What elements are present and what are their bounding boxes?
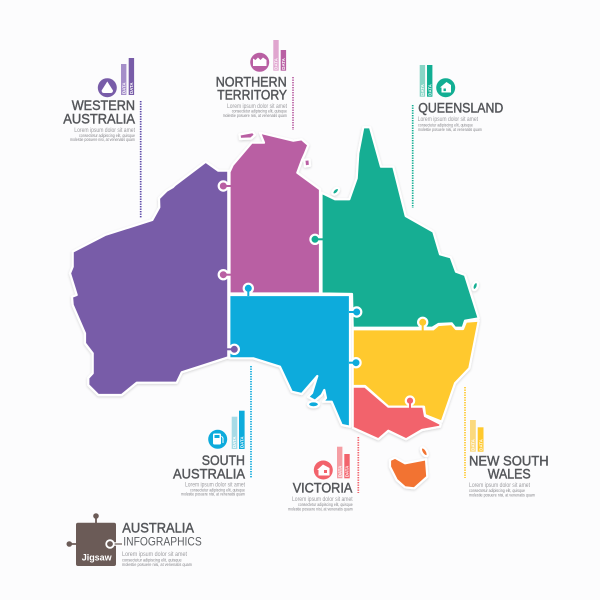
knob: New South Wales into Queensland bbox=[418, 318, 427, 331]
title: AUSTRALIA bbox=[122, 521, 194, 536]
bar chart: DATA bbox=[478, 438, 483, 451]
region: New South Wales bbox=[353, 321, 479, 422]
text block: molestie posuere nisi, at venenatis quam bbox=[181, 492, 245, 497]
panel: Victoria bbox=[288, 437, 358, 511]
bar chart: DATA bbox=[281, 57, 286, 70]
leader line bbox=[140, 101, 142, 218]
region: Northern Territory bbox=[230, 133, 320, 294]
heading: AUSTRALIA bbox=[173, 466, 245, 481]
icon: jigsaw piece: Jigsaw bbox=[82, 553, 112, 564]
region: Tasmania bbox=[390, 458, 427, 488]
leader line bbox=[464, 387, 466, 478]
text block bbox=[181, 481, 246, 497]
region: Queensland bbox=[322, 127, 479, 328]
knob: South Australia into Northern Territory bbox=[244, 284, 253, 296]
leader line bbox=[412, 105, 414, 208]
region: Victoria bbox=[353, 387, 441, 439]
heading bbox=[216, 75, 287, 102]
bar chart bbox=[273, 40, 286, 71]
bar chart: DATA bbox=[129, 82, 134, 94]
region: South Australia bbox=[229, 295, 350, 427]
bar chart: DATA bbox=[345, 465, 350, 477]
text block: consectetur adipiscing elit, quisque bbox=[79, 133, 136, 138]
panel: jigsaw logo and title bbox=[66, 513, 202, 567]
text block: consectetur adipiscing elit, quisque bbox=[122, 557, 182, 562]
text block: molestie posuere nisi, at venenatis quam bbox=[122, 562, 192, 567]
bar chart: DATA bbox=[420, 83, 425, 96]
text block: Lorem ipsum dolor sit amet bbox=[227, 103, 287, 110]
heading bbox=[469, 454, 549, 481]
icon: factory badge bbox=[250, 53, 269, 72]
knob: Victoria into New South Wales bbox=[406, 396, 414, 409]
heading: VICTORIA bbox=[293, 481, 352, 496]
heading: AUSTRALIA bbox=[63, 112, 135, 126]
island: Melville bbox=[240, 132, 255, 139]
text block: Lorem ipsum dolor sit amet bbox=[292, 496, 353, 503]
text block bbox=[122, 551, 192, 567]
icon: triangle badge bbox=[98, 78, 117, 97]
text block: consectetur adipiscing elit, quisque bbox=[190, 487, 246, 492]
knob: Northern Territory into Western Australia upper bbox=[219, 181, 231, 191]
title bbox=[122, 521, 202, 548]
text block: molestie posuere nisi, at venenatis quam bbox=[418, 127, 482, 132]
heading: NEW SOUTH bbox=[469, 454, 549, 469]
bar chart: DATA bbox=[274, 57, 279, 70]
text block: Lorem ipsum dolor sit amet bbox=[185, 481, 245, 488]
text block bbox=[418, 116, 482, 132]
text block: consectetur adipiscing elit, quisque bbox=[418, 123, 474, 128]
leader line bbox=[292, 77, 294, 130]
heading: QUEENSLAND bbox=[418, 101, 504, 116]
text block bbox=[223, 103, 288, 118]
bar chart bbox=[232, 411, 245, 449]
heading bbox=[63, 98, 135, 126]
text block: molestie posuere nisi, at venenatis quam bbox=[223, 113, 287, 118]
icon: house badge bbox=[436, 78, 455, 97]
knob: Queensland into Northern Territory bbox=[310, 235, 323, 244]
panel: Queensland bbox=[413, 65, 504, 208]
knob: South Australia into New South Wales bbox=[349, 358, 361, 367]
panel: Northern Territory bbox=[216, 40, 293, 130]
heading bbox=[173, 453, 245, 481]
text block: Lorem ipsum dolor sit amet bbox=[418, 116, 478, 123]
text block: consectetur adipiscing elit, quisque bbox=[232, 108, 288, 113]
leader line bbox=[250, 366, 252, 478]
knob: Western Australia into South Australia bbox=[227, 345, 239, 354]
heading: NORTHERN bbox=[216, 75, 287, 90]
heading: SOUTH bbox=[202, 453, 245, 468]
region: Western Australia bbox=[70, 162, 228, 395]
bar chart: DATA bbox=[427, 83, 432, 96]
island: Queensland east bbox=[472, 281, 479, 291]
island: Kangaroo bbox=[308, 401, 319, 407]
panel: Western Australia bbox=[63, 58, 141, 218]
text block: molestie posuere nisi, at venenatis quam bbox=[288, 506, 353, 511]
bar chart bbox=[121, 58, 134, 95]
map of Australia bbox=[70, 127, 479, 488]
text block: consectetur adipiscing elit, quisque bbox=[469, 488, 526, 493]
text block bbox=[288, 496, 353, 511]
leader line bbox=[357, 437, 359, 493]
text block: molestie posuere nisi, at venenatis quam bbox=[70, 137, 135, 142]
jigsaw knobs bbox=[219, 181, 427, 409]
icon: house badge bbox=[314, 460, 333, 480]
panel: New South Wales bbox=[465, 387, 549, 497]
island: Flinders bbox=[420, 446, 429, 457]
text block: consectetur adipiscing elit, quisque bbox=[298, 502, 353, 507]
knob: South Australia into Queensland bbox=[349, 307, 361, 317]
icon: fuel pump badge bbox=[208, 430, 227, 449]
knob: Northern Territory into Western Australia lower bbox=[219, 270, 231, 279]
heading: WESTERN bbox=[72, 98, 135, 113]
text block: Lorem ipsum dolor sit amet bbox=[122, 551, 187, 558]
bar chart bbox=[337, 447, 350, 478]
title: INFOGRAPHICS bbox=[123, 534, 202, 548]
bar chart bbox=[470, 420, 484, 452]
bar chart: DATA bbox=[240, 436, 244, 448]
heading: TERRITORY bbox=[217, 87, 287, 102]
text block: molestie posuere nisi, at venenatis quam bbox=[469, 492, 535, 497]
heading: WALES bbox=[488, 466, 531, 481]
text block bbox=[469, 482, 535, 497]
island: Queensland north bbox=[331, 187, 340, 196]
bar chart: DATA bbox=[121, 82, 126, 94]
text block: Lorem ipsum dolor sit amet bbox=[469, 482, 530, 489]
bar chart bbox=[420, 65, 432, 97]
bar chart: DATA bbox=[471, 438, 476, 451]
bar chart: DATA bbox=[232, 436, 237, 448]
island: Groote bbox=[304, 159, 310, 166]
text block: Lorem ipsum dolor sit amet bbox=[74, 127, 135, 134]
bar chart: DATA bbox=[337, 465, 342, 477]
panel: South Australia bbox=[173, 366, 251, 497]
text block bbox=[70, 127, 136, 142]
